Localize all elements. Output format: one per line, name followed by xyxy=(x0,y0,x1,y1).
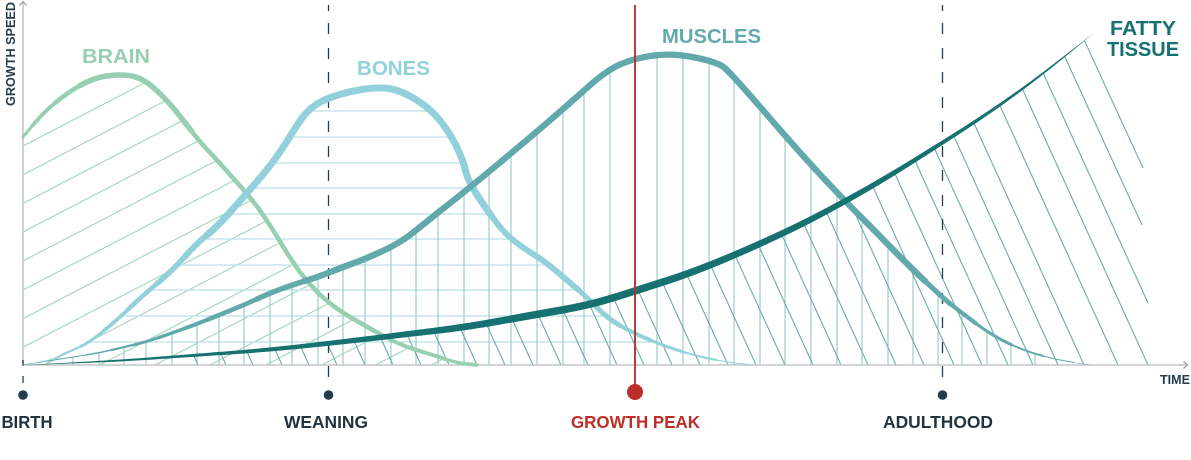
curve: muscles xyxy=(23,55,1089,365)
vertical axis: growth speed xyxy=(22,2,24,366)
bones hatching xyxy=(90,110,653,343)
axis label: time: TIME xyxy=(1160,373,1190,387)
milestone dot: adulthood xyxy=(938,390,947,400)
label: fatty tissue: FATTY xyxy=(1110,18,1177,40)
growth peak marker xyxy=(627,5,643,400)
label: fatty tissue: TISSUE xyxy=(1107,39,1179,61)
label: muscles: MUSCLES xyxy=(662,26,761,48)
muscles hatching xyxy=(47,58,1036,364)
label: weaning: WEANING xyxy=(284,412,368,432)
curve: bones xyxy=(23,88,753,365)
brain hatching xyxy=(24,83,442,364)
label: brain: BRAIN xyxy=(82,46,150,68)
horizontal axis: time xyxy=(23,364,1187,366)
arrow: vertical axis xyxy=(20,2,26,6)
curve: brain xyxy=(23,75,477,365)
milestone dot: weaning xyxy=(324,390,333,400)
axis label: growth speed: GROWTH SPEED xyxy=(4,2,18,106)
label: growth peak: GROWTH PEAK xyxy=(571,412,700,432)
label: birth: BIRTH xyxy=(2,412,52,432)
label: fatty tissue xyxy=(1107,18,1179,61)
dashed line: adulthood xyxy=(942,5,944,377)
dashed line: weaning xyxy=(328,5,330,377)
dashed line: birth xyxy=(22,360,24,383)
label: adulthood: ADULTHOOD xyxy=(883,412,993,432)
arrow: horizontal axis xyxy=(1184,362,1188,368)
label: bones: BONES xyxy=(357,58,430,80)
curve: fatty tissue xyxy=(23,33,1094,365)
fatty tissue hatching xyxy=(194,40,1148,364)
milestone dot: birth xyxy=(18,390,28,400)
milestone dashed lines xyxy=(23,5,942,383)
axes xyxy=(20,2,1188,368)
